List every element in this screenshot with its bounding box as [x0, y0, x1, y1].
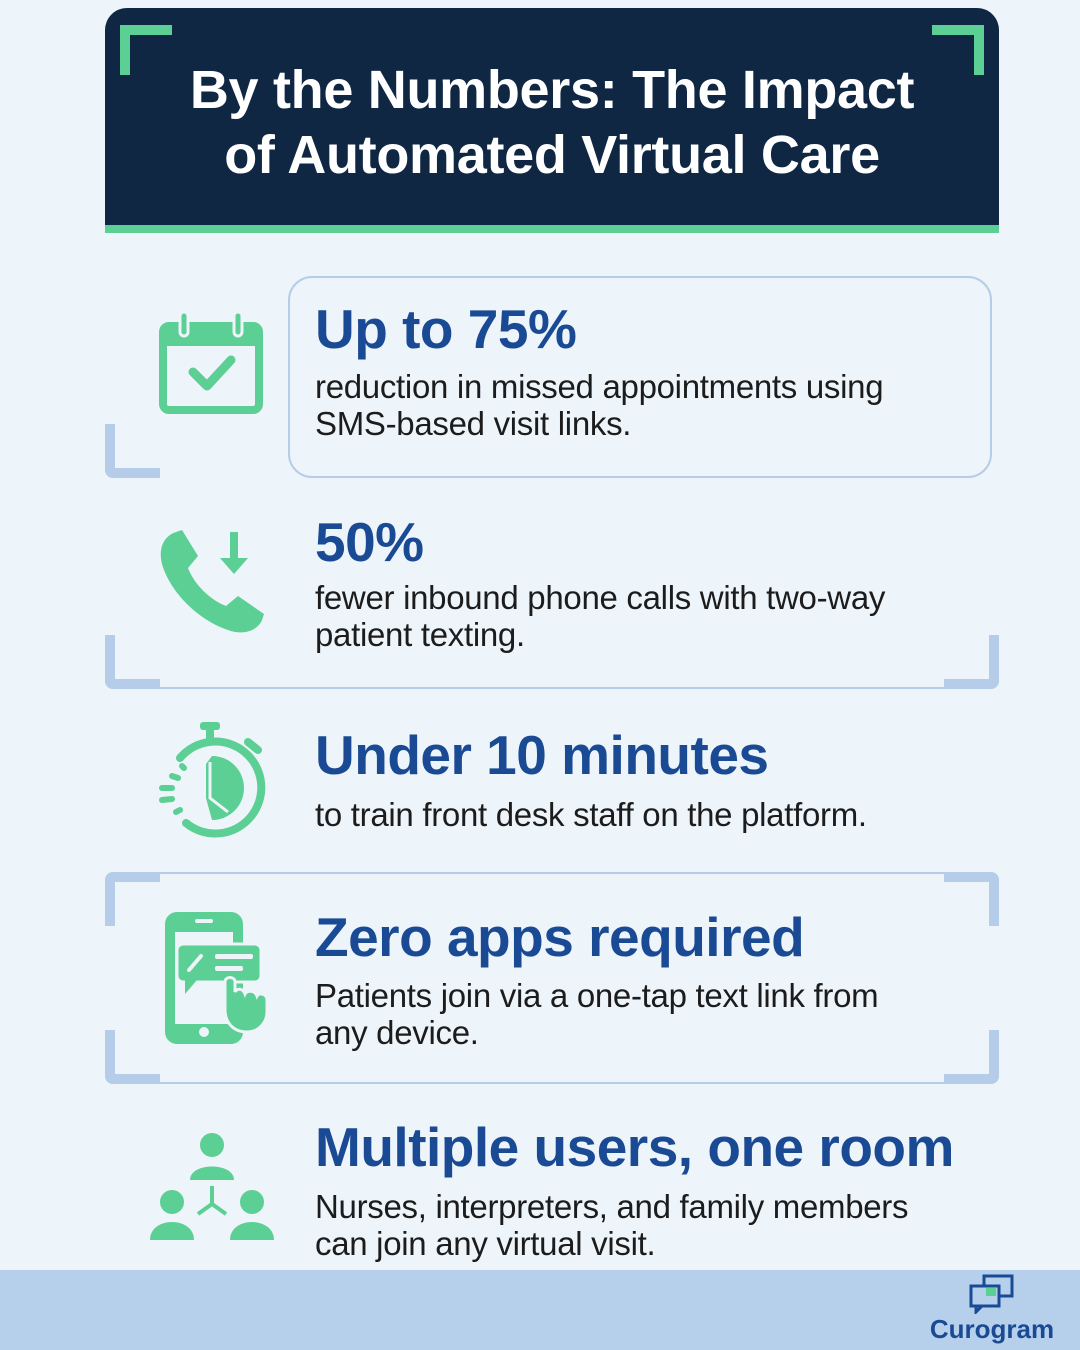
text: minutes: to train front desk staff on the platform. — [315, 796, 867, 833]
text: 75%: reduction in missed appointments using — [315, 368, 883, 405]
text: multiple users — [315, 1188, 908, 1262]
corner bracket right — [932, 25, 984, 75]
icon: chat bubbles — [970, 1274, 1014, 1314]
heading: up to 75%: Up to 75% — [315, 298, 576, 360]
icon: users — [150, 1133, 274, 1240]
corner bracket left — [120, 25, 172, 75]
bracket — [105, 424, 160, 478]
text: multiple users: Nurses, interpreters, and family members — [315, 1188, 908, 1225]
title — [190, 60, 914, 185]
text: zero apps: any device. — [315, 1014, 479, 1051]
heading: under 10 minutes: Under 10 minutes — [315, 724, 769, 786]
header — [105, 8, 999, 233]
icon: phone with link — [165, 912, 266, 1044]
text: 50%: patient texting. — [315, 616, 525, 653]
title: By the Numbers: The Impact — [190, 60, 914, 120]
heading: 50%: 50% — [315, 511, 424, 573]
text: 75%: SMS-based visit links. — [315, 405, 631, 442]
brand name: Curogram — [930, 1314, 1054, 1344]
icon: stopwatch — [159, 722, 266, 838]
text: 75% — [315, 368, 883, 442]
heading: zero apps: Zero apps required — [315, 906, 804, 968]
icon: calendar — [159, 314, 263, 414]
panel: missed appointments — [105, 276, 992, 478]
text: zero apps — [315, 977, 878, 1051]
panel: phone calls — [105, 635, 999, 689]
text: multiple users: can join any virtual visit. — [315, 1225, 655, 1262]
icon: phone — [160, 530, 264, 632]
footer — [0, 1270, 1080, 1350]
logo — [930, 1274, 1054, 1344]
text: zero apps: Patients join via a one-tap text link from — [315, 977, 878, 1014]
panel: zero apps — [105, 872, 999, 1084]
title: of Automated Virtual Care — [224, 125, 880, 185]
text: 50% — [315, 579, 886, 653]
text: 50%: fewer inbound phone calls with two-way — [315, 579, 885, 616]
heading: multiple users: Multiple users, one room — [315, 1116, 954, 1178]
